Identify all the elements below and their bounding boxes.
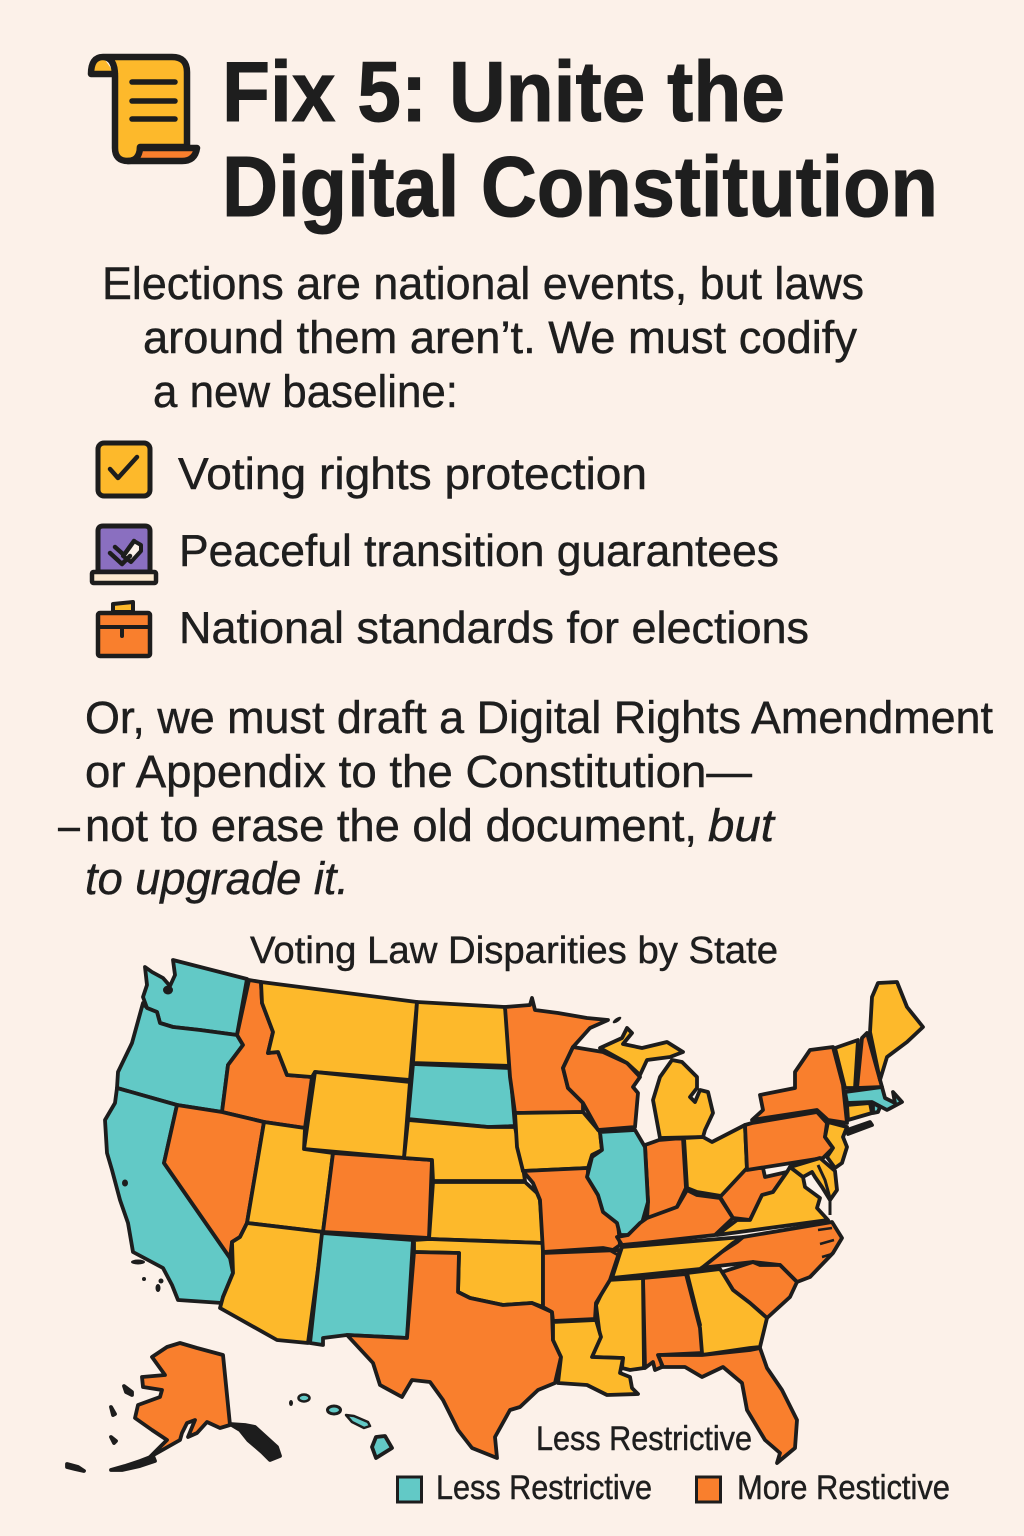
title	[222, 45, 938, 235]
amendment paragraph: but	[708, 800, 776, 851]
intro paragraph: Elections are national events, but laws	[102, 258, 864, 309]
map: US states by voting law restrictiveness	[67, 960, 923, 1471]
legend label: more restrictive: More Restictive	[737, 1469, 950, 1507]
legend label: less restrictive: Less Restrictive	[436, 1469, 652, 1507]
map title: Voting Law Disparities by State	[250, 930, 778, 972]
intro paragraph: around them aren’t. We must codify	[143, 312, 857, 363]
amendment paragraph	[58, 692, 993, 904]
state group: southern states	[543, 1167, 842, 1463]
stray map label: Less Restrictive	[536, 1420, 752, 1458]
title: Fix 5: Unite the	[222, 45, 785, 140]
state group: plains states	[347, 1002, 561, 1458]
amendment paragraph: to upgrade it.	[85, 853, 349, 904]
amendment paragraph: not to erase the old document,	[85, 800, 697, 851]
icon: briefcase	[98, 602, 150, 656]
intro paragraph	[102, 258, 864, 417]
amendment paragraph: —	[58, 800, 80, 851]
state group: northeast states	[745, 982, 923, 1215]
icon: checkbox	[98, 443, 150, 496]
icon: laptop with ballot check	[92, 526, 156, 583]
state group: western states	[105, 960, 432, 1345]
state group: midwest states	[505, 998, 747, 1252]
state: Hawaii	[289, 1394, 392, 1458]
title: Digital Constitution	[222, 140, 938, 235]
legend	[398, 1469, 950, 1507]
amendment paragraph: Or, we must draft a Digital Rights Amendment	[85, 692, 993, 743]
list item: peaceful transition: Peaceful transition guarantees	[179, 527, 779, 576]
islands and bays	[122, 986, 622, 1292]
icon: scroll	[91, 57, 197, 161]
list item: voting rights: Voting rights protection	[178, 450, 647, 499]
intro paragraph: a new baseline:	[153, 366, 458, 417]
legend swatch: less restrictive	[398, 1477, 422, 1502]
list item: national standards: National standards for elections	[179, 604, 809, 653]
state: Alaska	[67, 1343, 280, 1471]
legend swatch: more restrictive	[696, 1477, 720, 1502]
amendment paragraph: or Appendix to the Constitution—	[85, 746, 752, 797]
